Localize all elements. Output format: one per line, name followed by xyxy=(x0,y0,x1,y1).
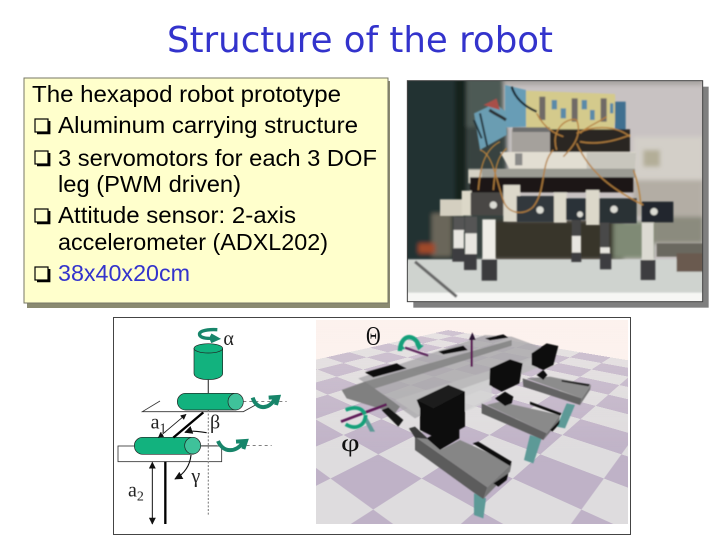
electronics xyxy=(524,91,616,132)
diagram: 3D robot model xyxy=(341,320,591,518)
cylinder: knee joint xyxy=(134,437,201,454)
icon: rotation knee xyxy=(218,441,246,450)
front servo xyxy=(417,385,465,450)
bullet: attitude sensor xyxy=(35,202,328,255)
bullet: aluminum: Aluminum carrying structure xyxy=(58,112,358,138)
icon: rotation hip xyxy=(253,397,278,407)
title: Structure of the robot xyxy=(167,20,553,61)
label: alpha: α xyxy=(223,328,234,350)
label: a2: a xyxy=(128,480,137,502)
arrow a1 xyxy=(158,414,186,438)
label: gamma: γ xyxy=(190,466,200,488)
far leg xyxy=(523,377,591,428)
label: a1: 1 xyxy=(160,421,167,436)
cylinder: base joint xyxy=(194,344,223,380)
plate xyxy=(500,152,636,169)
bullet: servomotors xyxy=(35,145,377,197)
panel: bottom figure frame xyxy=(114,318,630,534)
front beam xyxy=(342,382,400,413)
far servo xyxy=(532,343,558,380)
bullet: attitude sensor: Attitude sensor: 2-axis xyxy=(58,202,296,228)
arrow beta xyxy=(185,431,207,433)
bullet: servomotors: 3 servomotors for each 3 DOF xyxy=(58,145,377,171)
label: phi: φ xyxy=(341,429,360,457)
panel: robot description xyxy=(24,78,390,308)
arrow gamma xyxy=(175,455,191,479)
bullet: dimensions: 38x40x20cm xyxy=(58,260,190,286)
panel: 3D model floor xyxy=(316,320,628,524)
bullet: servomotors: leg (PWM driven) xyxy=(58,171,241,197)
diagram: leg kinematics xyxy=(118,328,287,524)
middle servo xyxy=(489,359,523,406)
link a1 xyxy=(173,412,203,438)
legs xyxy=(453,217,465,232)
label: a1: a xyxy=(151,411,160,433)
pads xyxy=(365,363,407,377)
label: a2: 2 xyxy=(137,490,144,505)
servos xyxy=(440,199,463,216)
icon: rotation alpha xyxy=(199,330,217,342)
label: beta: β xyxy=(210,411,220,433)
wires xyxy=(478,113,643,212)
photo: hexapod prototype xyxy=(400,70,709,308)
bullet: attitude sensor: accelerometer (ADXL202) xyxy=(58,229,328,255)
middle leg xyxy=(482,402,562,463)
arrow a2 xyxy=(151,462,154,524)
arrows xyxy=(405,348,428,356)
label: theta: Θ xyxy=(366,320,381,350)
text: intro line: The hexapod robot prototype xyxy=(32,81,341,107)
mid stack xyxy=(547,129,630,152)
body plate xyxy=(358,335,548,418)
link a2 xyxy=(162,462,169,524)
front leg xyxy=(409,427,512,518)
cylinder: hip joint xyxy=(177,393,243,410)
